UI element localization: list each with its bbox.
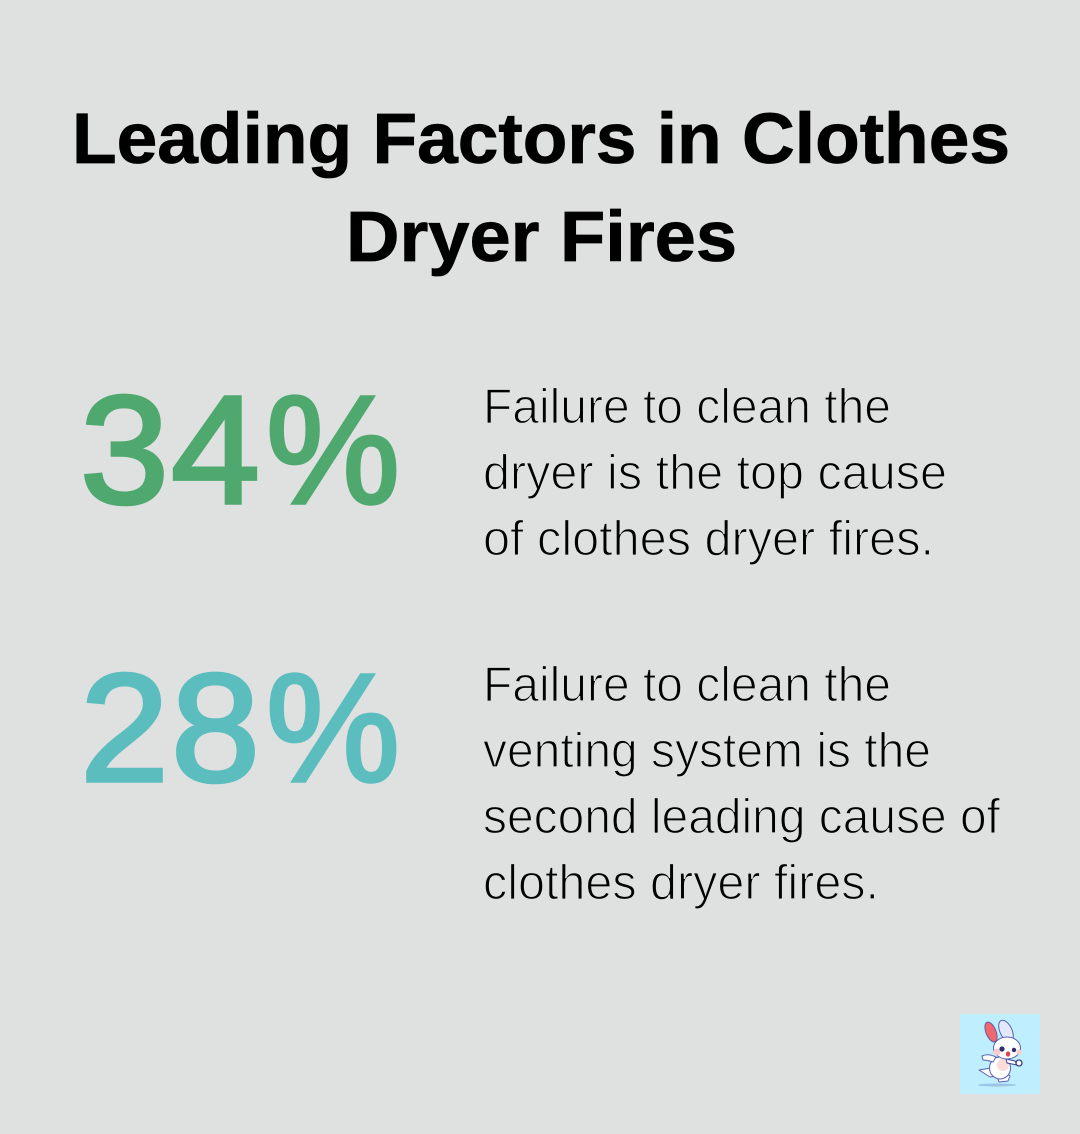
description: 34%: dryer is the top cause: [483, 446, 947, 500]
description: 28%: clothes dryer fires.: [483, 856, 879, 910]
stat: 34%: %: [266, 364, 400, 536]
description: 28%: [483, 658, 1000, 910]
stat: 28%: 2: [80, 642, 169, 814]
title: Leading Factors in Clothes: [72, 100, 1010, 179]
title: [72, 100, 1010, 277]
stat: 34%: [80, 364, 400, 536]
stat: 28%: [80, 642, 400, 814]
description: 34%: [483, 380, 947, 566]
stat: 28%: %: [266, 642, 400, 814]
stat: 34%: 3: [80, 364, 169, 536]
description: 34%: Failure to clean the: [483, 380, 891, 434]
description: 28%: second leading cause of: [483, 790, 1000, 844]
stat: 28%: 8: [171, 642, 260, 814]
icon: running rabbit logo: [960, 1014, 1040, 1094]
description: 28%: Failure to clean the: [483, 658, 891, 712]
description: 34%: of clothes dryer fires.: [483, 512, 934, 566]
title: Dryer Fires: [346, 198, 737, 277]
description: 28%: venting system is the: [483, 724, 931, 778]
stat: 34%: 4: [171, 364, 260, 536]
